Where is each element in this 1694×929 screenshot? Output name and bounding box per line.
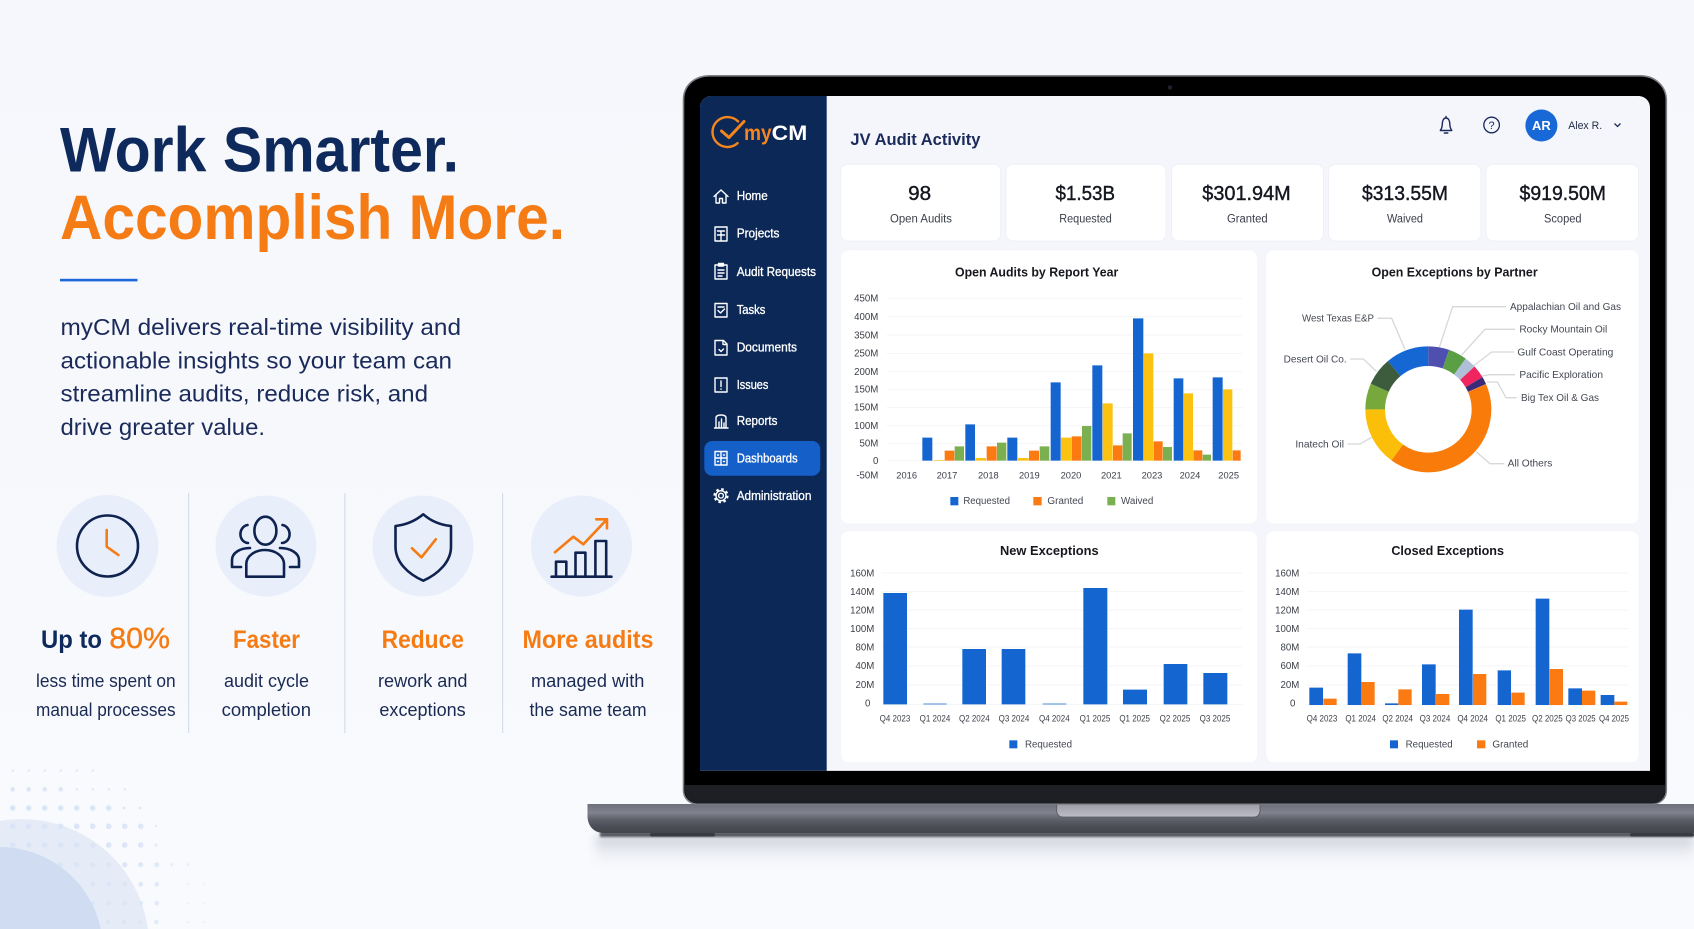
benefit: reduce: [372, 496, 474, 720]
description paragraph: streamline audits, reduce risk, and: [60, 381, 428, 407]
donut labels: Inatech Oil: [1295, 439, 1344, 450]
legend: Requested: [1406, 740, 1453, 751]
y axis labels: 0: [873, 456, 878, 467]
panel: closed exceptions: Closed Exceptions: [1391, 543, 1504, 558]
icon: help: [1484, 117, 1499, 133]
x axis labels: 2025: [1218, 470, 1239, 480]
y axis labels: [854, 294, 878, 481]
x axis labels: Q2 2025: [1532, 713, 1563, 723]
x axis labels: Q1 2025: [1495, 713, 1526, 723]
sidebar: [700, 96, 827, 771]
benefit: faster: [216, 496, 316, 720]
donut labels: West Texas E&P: [1302, 314, 1374, 325]
x axis labels: Q1 2025: [1119, 713, 1150, 723]
y axis labels: 200M: [854, 367, 878, 378]
headline: Work Smarter.: [60, 116, 459, 186]
donut labels: Rocky Mountain Oil: [1519, 325, 1607, 336]
legend: [1390, 740, 1528, 751]
bars: requested: [883, 588, 1227, 704]
description paragraph: drive greater value.: [60, 414, 265, 440]
y axis labels: 80M: [1281, 642, 1299, 653]
donut labels: Gulf Coast Operating: [1517, 348, 1613, 359]
benefit: faster: completion: [222, 700, 311, 720]
benefit: 80 percent less time: manual processes: [36, 700, 176, 720]
y axis labels: 120M: [850, 605, 874, 616]
y axis labels: 160M: [850, 568, 874, 579]
leader lines: [1347, 307, 1517, 464]
benefit: 80 percent less time: less time spent on: [36, 671, 176, 691]
laptop screen background: [700, 96, 1650, 771]
icon: growth chart: [531, 496, 632, 596]
KPI: granted: [1172, 164, 1324, 241]
x axis labels: Q3 2024: [999, 713, 1029, 723]
nav: documents: [715, 340, 797, 355]
y axis labels: 0: [865, 699, 870, 710]
y axis labels: 120M: [1275, 605, 1299, 616]
x axis labels: 2023: [1142, 470, 1162, 480]
y axis labels: 60M: [1281, 661, 1299, 672]
description paragraph: [60, 314, 461, 440]
x axis labels: Q2 2024: [1382, 713, 1413, 723]
x axis labels: Q4 2024: [1039, 713, 1070, 723]
avatar: AR: [1532, 118, 1551, 133]
laptop shadow reflection: [596, 836, 1694, 872]
y axis labels: 450M: [854, 294, 878, 305]
icon: bell: [1440, 116, 1452, 133]
top bar: notifications, help and user: [1440, 110, 1620, 142]
logo: CM: [772, 122, 807, 145]
avatar: [1525, 110, 1557, 142]
y axis labels: 250M: [854, 349, 878, 360]
y axis labels: 150M: [854, 385, 878, 396]
KPI cards: [841, 164, 1638, 241]
benefit: more audits: the same team: [530, 700, 647, 720]
x axis labels: 2021: [1101, 470, 1122, 480]
x axis labels: Q3 2025: [1200, 713, 1230, 723]
nav: administration: Administration: [737, 489, 811, 503]
dashboard title: JV Audit Activity: [850, 130, 981, 149]
legend: Requested: [1025, 740, 1072, 751]
headline: Accomplish More.: [60, 183, 565, 253]
benefit: reduce: exceptions: [379, 700, 466, 720]
KPI: requested: [1006, 164, 1166, 241]
y axis labels: 50M: [860, 439, 878, 450]
x axis labels: [896, 470, 1239, 480]
y axis labels: 80M: [856, 642, 874, 653]
x axis labels: Q4 2023: [1307, 713, 1337, 723]
nav: home: [714, 189, 768, 203]
x axis labels: Q4 2025: [1599, 713, 1629, 723]
active nav highlight: [704, 441, 820, 476]
legend: Granted: [1047, 496, 1083, 507]
donut labels: All Others: [1508, 459, 1552, 470]
x axis labels: Q2 2024: [959, 713, 990, 723]
icon: clock: [56, 495, 158, 597]
panel: open audits by report year: [841, 250, 1257, 524]
y axis labels: 20M: [856, 680, 874, 691]
benefit: more audits: [522, 496, 654, 720]
KPI: waived: $313.55M: [1362, 183, 1448, 205]
laptop lid: [684, 76, 1666, 804]
bars: granted: [1323, 669, 1627, 705]
bars: requested: [1309, 599, 1614, 705]
panel: new exceptions: New Exceptions: [1000, 543, 1099, 558]
KPI: scoped: [1486, 164, 1638, 241]
donut labels: Big Tex Oil & Gas: [1521, 393, 1599, 404]
KPI: scoped: $919.50M: [1520, 183, 1606, 205]
benefit: faster: Faster: [233, 626, 300, 654]
headline: [60, 116, 565, 253]
description paragraph: actionable insights so your team can: [60, 347, 452, 373]
nav: issues: [715, 378, 768, 392]
KPI: open audits: 98: [908, 183, 931, 205]
y axis labels: 140M: [1275, 587, 1299, 598]
nav: reports: [714, 414, 777, 428]
benefit: 80 percent less time: Up to: [41, 626, 102, 654]
benefit: 80 percent less time: 80%: [109, 623, 170, 655]
y axis labels: 100M: [850, 624, 874, 635]
y axis labels: 20M: [1281, 680, 1299, 691]
x axis labels: Q1 2025: [1080, 713, 1110, 723]
logo: [713, 117, 807, 147]
logo: my: [744, 122, 772, 145]
decorative corner circles and dots: [0, 771, 204, 929]
donut labels: [1284, 302, 1621, 470]
icon: people: [216, 496, 316, 596]
description paragraph: myCM delivers real-time visibility and: [60, 314, 461, 340]
x axis labels: Q2 2025: [1160, 713, 1190, 723]
benefit: 80 percent less time: [36, 495, 176, 720]
x axis labels: Q1 2024: [1345, 713, 1376, 723]
x axis labels: 2024: [1180, 470, 1200, 480]
panel: open exceptions by partner: [1266, 250, 1639, 524]
x axis labels: Q3 2024: [1420, 713, 1450, 723]
x axis labels: [880, 713, 1230, 723]
KPI: granted: $301.94M: [1202, 183, 1291, 205]
y axis labels: 0: [1290, 699, 1295, 710]
KPI: scoped: Scoped: [1544, 213, 1582, 225]
KPI: open audits: Open Audits: [890, 213, 952, 225]
benefit: reduce: rework and: [378, 671, 468, 691]
KPI: waived: Waived: [1387, 213, 1423, 225]
donut labels: Appalachian Oil and Gas: [1510, 302, 1621, 313]
nav: projects: [715, 227, 779, 241]
panel: open exceptions by partner: Open Exceptions by Partner: [1372, 265, 1538, 280]
donut chart: [1353, 334, 1503, 484]
x axis labels: Q3 2025: [1566, 713, 1596, 723]
nav: dashboards: [715, 451, 798, 465]
panel: new exceptions: [841, 531, 1257, 763]
benefit: reduce: Reduce: [382, 626, 464, 654]
panel: open audits by report year: Open Audits by Report Year: [955, 265, 1118, 280]
legend: Granted: [1492, 740, 1528, 751]
bars: requested: [922, 318, 1223, 461]
x axis labels: 2018: [978, 470, 999, 480]
icon: shield: [372, 496, 474, 596]
bars: scoped yellow: [934, 353, 1232, 461]
y axis labels: [850, 568, 874, 710]
benefit: more audits: More audits: [522, 626, 654, 654]
x axis labels: 2016: [896, 470, 917, 480]
KPI: open audits: [841, 164, 1001, 241]
y axis labels: 160M: [1275, 568, 1299, 579]
x axis labels: 2020: [1061, 470, 1081, 480]
y axis labels: 350M: [854, 330, 878, 341]
y axis labels: -50M: [856, 470, 878, 481]
KPI: requested: Requested: [1059, 213, 1112, 225]
x axis labels: Q4 2024: [1457, 713, 1488, 723]
nav: home: Home: [737, 189, 768, 203]
x axis labels: 2019: [1019, 470, 1040, 480]
x axis labels: Q1 2024: [920, 713, 950, 723]
KPI: granted: Granted: [1227, 213, 1268, 225]
y axis labels: 40M: [856, 661, 874, 672]
top bar: notifications, help and user: Alex R.: [1568, 120, 1602, 132]
x axis labels: Q4 2023: [880, 713, 910, 723]
y axis labels: [1275, 568, 1299, 710]
KPI: requested: $1.53B: [1056, 183, 1115, 205]
y axis labels: 150M: [854, 403, 878, 414]
nav: tasks: [715, 303, 765, 317]
nav: projects: Projects: [737, 227, 779, 241]
donut labels: Pacific Exploration: [1519, 370, 1603, 381]
y axis labels: 400M: [854, 312, 878, 323]
nav: documents: Documents: [737, 341, 797, 355]
bars: granted: [945, 436, 1241, 461]
x axis labels: 2017: [937, 470, 957, 480]
nav: reports: Reports: [737, 414, 777, 428]
bars: waived: [955, 426, 1211, 461]
legend: Waived: [1121, 496, 1153, 507]
accent rule: [60, 279, 138, 281]
KPI: waived: [1328, 164, 1481, 241]
benefit: faster: audit cycle: [224, 671, 309, 691]
nav: tasks: Tasks: [737, 303, 765, 317]
nav: audit requests: Audit Requests: [737, 265, 816, 279]
laptop base: [588, 804, 1694, 837]
nav: audit requests: [715, 264, 816, 279]
y axis labels: 100M: [854, 421, 878, 432]
panel: closed exceptions: [1266, 531, 1639, 763]
x axis labels: [1307, 713, 1629, 723]
legend: [950, 496, 1153, 507]
donut labels: Desert Oil Co.: [1284, 354, 1347, 365]
legend: Requested: [963, 496, 1010, 507]
nav: dashboards: Dashboards: [737, 451, 798, 465]
benefit: more audits: managed with: [531, 671, 644, 691]
y axis labels: 100M: [1275, 624, 1299, 635]
nav: issues: Issues: [737, 378, 768, 392]
y axis labels: 140M: [850, 587, 874, 598]
icon: help: ?: [1489, 120, 1495, 132]
